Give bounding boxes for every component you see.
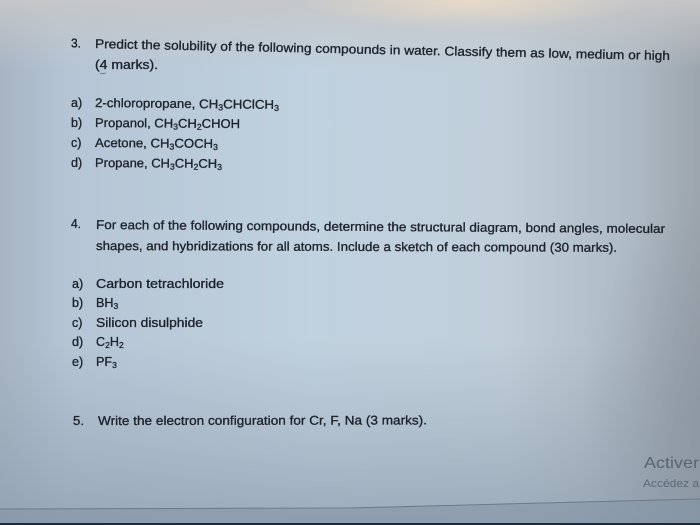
question 4 item d: H [110, 335, 119, 349]
question 4 item a label: a) [72, 277, 83, 291]
question 3 item b: CH [178, 117, 197, 131]
question 3 item d: CH [198, 157, 217, 171]
question 3 item c: Acetone, CH [95, 136, 166, 150]
question 3 item b: 2 [197, 122, 202, 132]
spell-check squiggle [100, 73, 106, 74]
question 4 item b label: b) [72, 296, 83, 310]
watermark subtext: Accédez a [643, 478, 700, 490]
question 3 item c label: c) [71, 136, 82, 150]
question 4 item e: 3 [112, 360, 117, 370]
question 3 item a: CHClCH [223, 97, 274, 112]
question 4 item d label: d) [72, 335, 83, 349]
question 3 item a: 3 [218, 102, 223, 112]
question 3 [71, 36, 670, 172]
question 3 item c: 3 [213, 142, 218, 152]
question 3 item a: 3 [274, 103, 279, 113]
question 3 item b: 3 [173, 122, 178, 132]
question 4 [71, 217, 665, 370]
question 4 item d: 2 [105, 340, 110, 350]
question 5 prompt: Write the electron configuration for Cr, F, Na (3 marks). [98, 413, 427, 428]
question 4 number: 4. [71, 217, 81, 231]
question 3 item d: CH [175, 157, 194, 171]
question 3 prompt line 2: (4 marks). [95, 58, 158, 72]
question 4 prompt line 1: For each of the following compounds, determine the structural diagram, bond angles, molecular [96, 218, 665, 236]
question 3 prompt line 1: Predict the solubility of the following compounds in water. Classify them as low, medium or high [95, 37, 670, 63]
question 3 item c: COCH [174, 137, 213, 151]
question 3 item d: 3 [217, 162, 222, 172]
question 4 item c label: c) [72, 316, 82, 330]
windows activation watermark [643, 455, 700, 490]
question 3 number: 3. [71, 36, 81, 50]
question 4 prompt line 2: shapes, and hybridizations for all atoms. Include a sketch of each compound (30 marks). [96, 239, 617, 255]
question 4 item a: Carbon tetrachloride [96, 277, 224, 291]
question 3 item d: 3 [170, 162, 175, 172]
question 5 number: 5. [73, 414, 84, 428]
question 4 item e label: e) [72, 355, 83, 369]
question 4 item b: BH [96, 296, 114, 310]
question 3 item d: Propane, CH [95, 156, 168, 171]
question 3 item b label: b) [71, 116, 82, 130]
question 3 item c: 3 [169, 142, 175, 152]
question 3 item d: 2 [193, 162, 199, 172]
question 3 item b: Propanol, CH [95, 116, 171, 131]
question 4 item b: 3 [114, 301, 118, 311]
question 4 item d: C [96, 335, 105, 349]
question 5 [73, 413, 427, 428]
watermark heading: Activer [644, 455, 700, 472]
question 3 item a label: a) [71, 96, 82, 110]
question 3 item a: 2-chloropropane, CH [95, 96, 212, 111]
question 3 item b: CHOH [202, 117, 240, 131]
question 4 item e: PF [96, 355, 112, 369]
question 4 item d: 2 [119, 340, 124, 350]
question 3 item d label: d) [71, 156, 82, 170]
question 4 item c: Silicon disulphide [96, 316, 203, 330]
